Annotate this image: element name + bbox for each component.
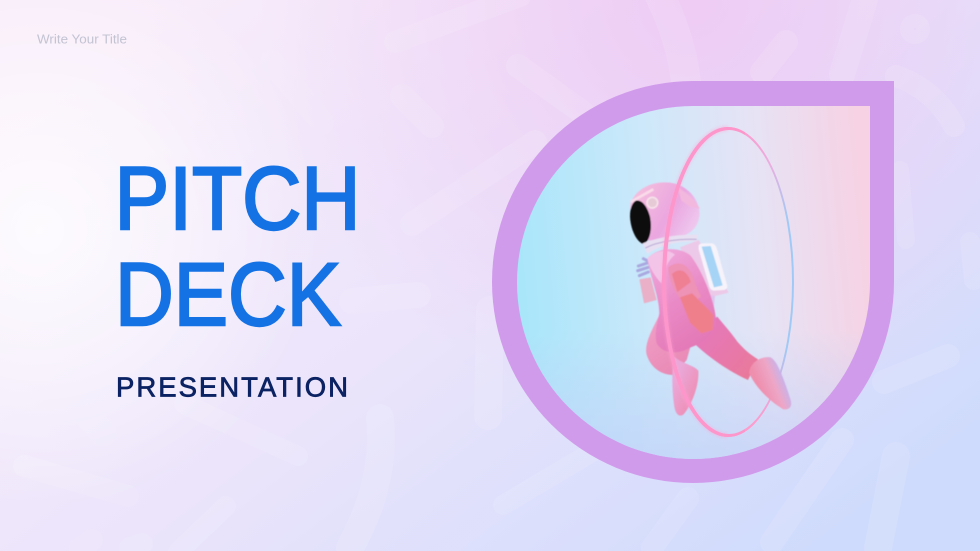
rear boot (672, 357, 698, 416)
chest pack and tubes (638, 259, 657, 303)
neon ring front half (662, 126, 745, 438)
heading line: pitch: PITCH (114, 148, 360, 248)
neck collar (643, 235, 698, 254)
teardrop photo panel (510, 100, 875, 465)
torso (647, 249, 716, 352)
subtitle: PRESENTATION (116, 372, 348, 402)
shoulder highlight (647, 251, 675, 283)
teardrop frame (492, 81, 894, 483)
heading: pitch deck (114, 148, 360, 344)
helmet (630, 182, 700, 254)
photo background (510, 100, 875, 465)
visor (630, 201, 651, 244)
front boot (749, 357, 791, 409)
arm (668, 263, 713, 333)
neon ring back half (662, 127, 794, 437)
heading line: deck: DECK (115, 244, 341, 344)
backpack (680, 240, 729, 310)
astronaut (630, 182, 791, 416)
small title: Write Your Title (37, 32, 127, 46)
rear leg (646, 317, 693, 375)
front leg (687, 317, 758, 380)
